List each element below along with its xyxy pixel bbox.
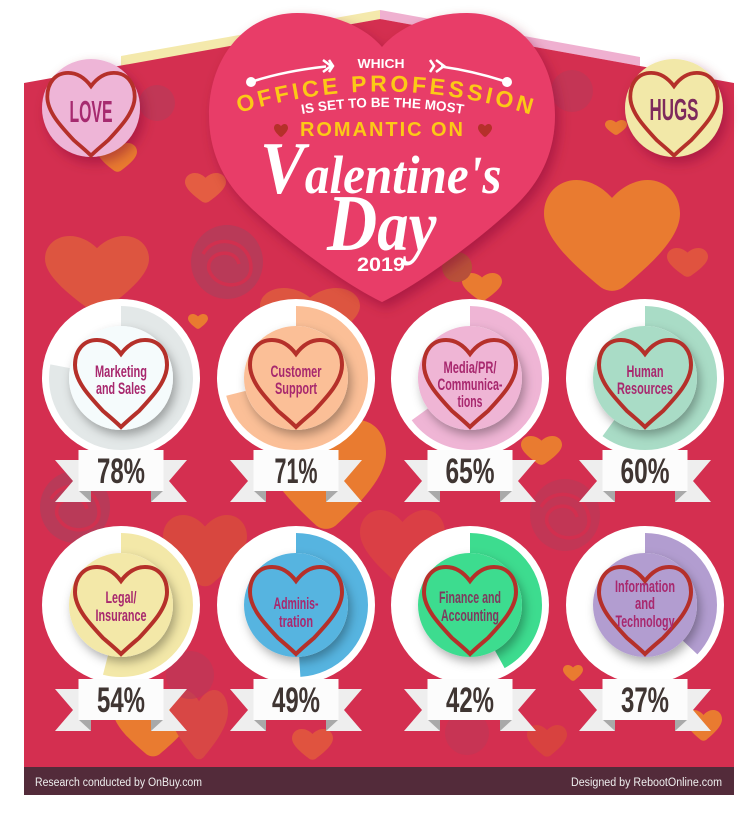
card: media/pr/communications 65%: Communica- bbox=[438, 375, 502, 394]
candy heart: hugs bbox=[625, 59, 723, 157]
card: finance and accounting 42% bbox=[391, 526, 549, 731]
title heart bbox=[208, 10, 564, 310]
card: customer support 71%: Support bbox=[275, 379, 317, 398]
title: 2019: 2019 bbox=[357, 255, 405, 276]
title: valentine's: Valentine's bbox=[260, 128, 501, 210]
card: administration 49% bbox=[217, 526, 375, 731]
card: human resources 60%: 60% bbox=[620, 452, 670, 491]
background hearts bbox=[45, 120, 722, 760]
card: legal/insurance 54%: Legal/ bbox=[106, 588, 137, 607]
card: information and technology 37%: Information bbox=[615, 577, 675, 596]
card: legal/insurance 54% bbox=[42, 526, 200, 731]
footer bar bbox=[24, 767, 734, 795]
card: legal/insurance 54%: Insurance bbox=[95, 606, 147, 625]
card: marketing and sales 78%: Marketing bbox=[95, 362, 147, 381]
title: office profession: OFFICE PROFESSION bbox=[237, 76, 534, 114]
card: information and technology 37%: and bbox=[635, 594, 655, 613]
card: information and technology 37%: 37% bbox=[621, 681, 669, 720]
card: administration 49%: 49% bbox=[272, 681, 320, 720]
arrow: right bbox=[430, 60, 512, 87]
footer credit: research: Research conducted by OnBuy.com bbox=[35, 777, 202, 789]
card: customer support 71%: 71% bbox=[274, 452, 318, 491]
card: finance and accounting 42%: Finance and bbox=[439, 588, 501, 607]
top strip: pink roof edge bbox=[380, 10, 640, 66]
title: romantic on: ROMANTIC ON bbox=[300, 119, 463, 141]
card: administration 49%: Adminis- bbox=[274, 594, 318, 613]
icon: small heart left bbox=[274, 124, 288, 137]
candy heart: love bbox=[42, 59, 140, 157]
card: marketing and sales 78%: 78% bbox=[97, 452, 145, 491]
card: human resources 60%: Resources bbox=[617, 379, 673, 398]
card: media/pr/communications 65% bbox=[391, 299, 549, 502]
title: day: Day bbox=[326, 180, 437, 268]
card: marketing and sales 78% bbox=[42, 299, 200, 502]
card: legal/insurance 54%: 54% bbox=[97, 681, 145, 720]
card: information and technology 37%: Technology bbox=[616, 612, 675, 631]
card: human resources 60% bbox=[566, 299, 724, 502]
footer credit: designer: Designed by RebootOnline.com bbox=[571, 777, 722, 789]
icon: small heart right bbox=[478, 124, 492, 137]
card: human resources 60%: Human bbox=[626, 362, 664, 381]
card: finance and accounting 42%: 42% bbox=[446, 681, 494, 720]
card: information and technology 37% bbox=[566, 526, 724, 731]
arrow: left bbox=[246, 60, 333, 87]
candy heart: hugs: HUGS bbox=[650, 92, 698, 127]
title: is set to be the most: IS SET TO BE THE MOST bbox=[301, 98, 464, 114]
card: finance and accounting 42%: Accounting bbox=[441, 606, 499, 625]
card: administration 49%: tration bbox=[279, 612, 313, 631]
title: which: WHICH bbox=[358, 57, 404, 71]
card: media/pr/communications 65%: tions bbox=[458, 392, 482, 411]
candy heart: love: LOVE bbox=[70, 94, 112, 129]
card: customer support 71% bbox=[217, 299, 375, 502]
card: customer support 71%: Customer bbox=[270, 362, 322, 381]
background roses bbox=[40, 70, 600, 755]
card: marketing and sales 78%: and Sales bbox=[96, 379, 146, 398]
card: media/pr/communications 65%: Media/PR/ bbox=[444, 358, 497, 377]
top strip: yellow roof edge bbox=[121, 10, 380, 66]
card: media/pr/communications 65%: 65% bbox=[446, 452, 494, 491]
